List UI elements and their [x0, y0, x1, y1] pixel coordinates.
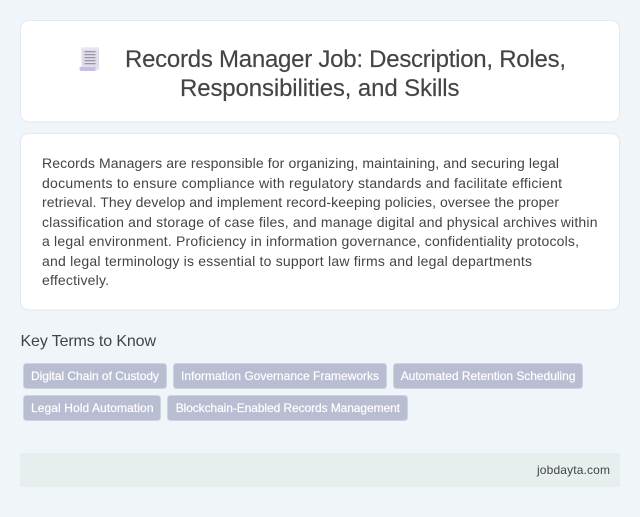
- title: Responsibilities, and Skills: [180, 75, 460, 102]
- description text: a legal environment. Proficiency in information governance, confidentiality protocols,: [42, 233, 579, 249]
- tag: legal hold automation: [24, 396, 160, 420]
- panel: title card: [20, 20, 620, 122]
- footer bar: [20, 453, 620, 487]
- description text: effectively.: [42, 272, 109, 288]
- description text: classification and storage of case files, and manage digital and physical archives within: [42, 214, 598, 230]
- tag: information governance frameworks: Information Governance Frameworks: [181, 369, 379, 383]
- tag: information governance frameworks: [174, 364, 386, 388]
- panel: description card: [20, 134, 620, 310]
- tag: automated retention scheduling: [394, 364, 582, 388]
- tag: legal hold automation: Legal Hold Automation: [31, 401, 154, 415]
- tag list: [24, 364, 582, 420]
- description text: Records Managers are responsible for organizing, maintaining, and securing legal: [42, 155, 559, 171]
- title: Records Manager Job: Description, Roles,: [125, 46, 566, 73]
- icon: records document scroll: [80, 47, 99, 71]
- tag: digital chain of custody: [24, 364, 166, 388]
- tag: blockchain-enabled records management: Blockchain-Enabled Records Management: [176, 401, 401, 415]
- tag: automated retention scheduling: Automated Retention Scheduling: [401, 369, 576, 383]
- description text: retrieval. They develop and implement record-keeping policies, oversee the proper: [42, 194, 559, 210]
- tag: digital chain of custody: Digital Chain of Custody: [31, 369, 159, 383]
- description text: and legal terminology is essential to support law firms and legal departments: [42, 253, 532, 269]
- description text: [42, 155, 598, 288]
- description text: documents to ensure compliance with regulatory standards and facilitate efficient: [42, 175, 562, 191]
- tag: blockchain-enabled records management: [168, 396, 408, 420]
- heading: key terms: Key Terms to Know: [20, 333, 156, 350]
- title: [125, 46, 566, 102]
- footer source text: jobdayta.com: [536, 463, 610, 477]
